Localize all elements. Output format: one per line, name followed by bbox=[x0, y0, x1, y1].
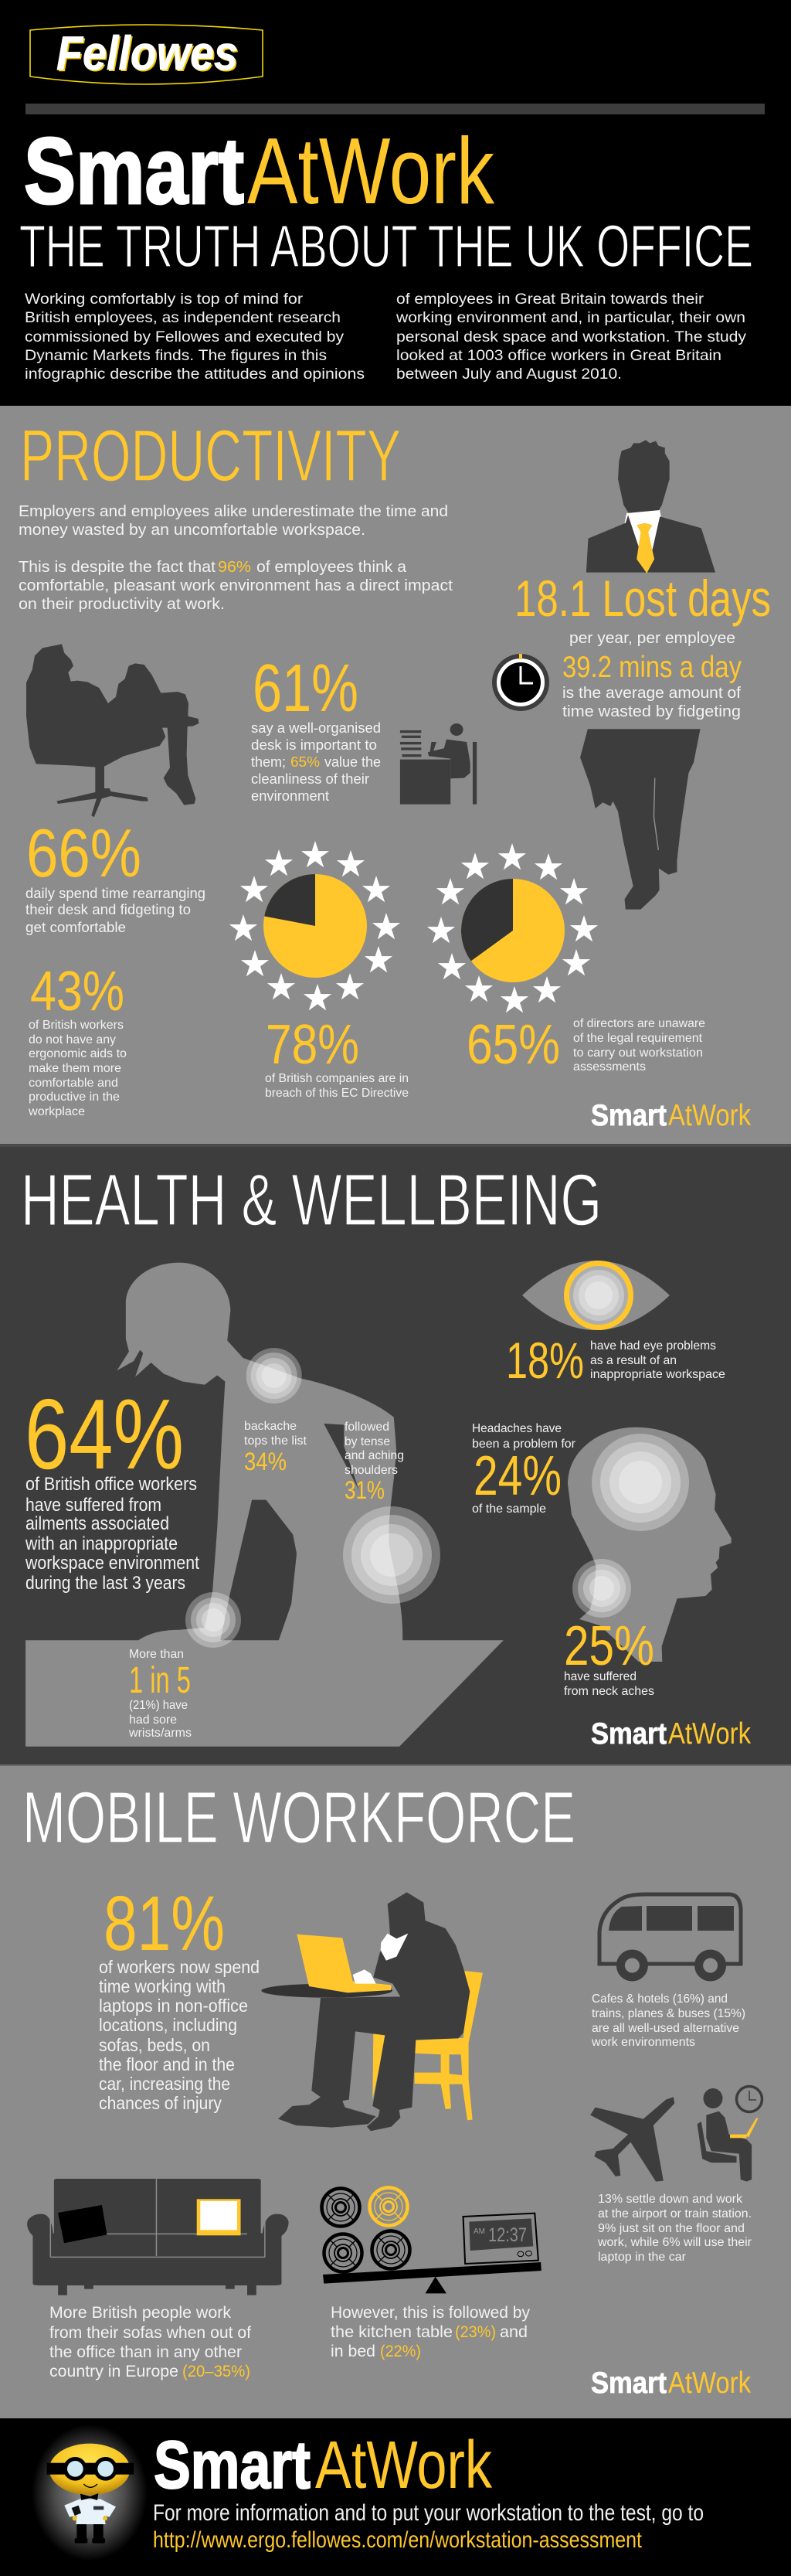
stat: 61%: desk is important to bbox=[251, 737, 377, 753]
illustration: head profile bbox=[568, 1428, 732, 1662]
icon: seated person with laptop and clock bbox=[698, 2087, 762, 2182]
text: cafes and hotels: Cafes & hotels (16%) and bbox=[592, 1992, 728, 2006]
stat: 64%: workspace environment bbox=[25, 1553, 199, 1574]
icon: desk worker bbox=[400, 723, 477, 805]
stat: 61%: environment bbox=[251, 788, 329, 804]
stat: 81%: laptops in non-office bbox=[99, 1996, 248, 2016]
text: kitchen table and bed: (23%) bbox=[455, 2323, 496, 2341]
logo: SmartAtWork footer bbox=[154, 2428, 492, 2503]
panel: health background bbox=[0, 1144, 791, 1764]
logo: SmartAtWork footer: Smart bbox=[154, 2428, 311, 2503]
text: cafes and hotels: trains, planes & buses (15%) bbox=[592, 2007, 745, 2020]
intro text: left column bbox=[25, 291, 365, 383]
stat: 64% bbox=[25, 1379, 199, 1594]
stat: backache 34% bbox=[244, 1420, 307, 1475]
text: kitchen table and bed bbox=[331, 2304, 530, 2360]
panel: mobile workforce background bbox=[0, 1764, 791, 2418]
intro text: right column: between July and August 2010. bbox=[396, 366, 622, 383]
stat: 61%: say a well-organised bbox=[251, 720, 381, 736]
intro text: left column: infographic describe the attitudes and opinions bbox=[25, 366, 365, 383]
icon: clock bbox=[492, 654, 549, 711]
text: airport and train station: work, while 6% will use their bbox=[597, 2236, 752, 2249]
text: airport and train station: laptop in the car bbox=[598, 2251, 687, 2264]
icon: eye bbox=[522, 1261, 670, 1330]
logo: Fellowes: Fellowes bbox=[56, 27, 238, 80]
logo: SmartAtWork mobile: Smart bbox=[591, 2367, 667, 2400]
stat: 43%: 43% bbox=[30, 961, 124, 1023]
stat: 66%: daily spend time rearranging bbox=[25, 885, 205, 901]
stat: shoulders 31%: shoulders bbox=[345, 1464, 398, 1477]
illustration: man with laptop at cafe table bbox=[261, 1892, 483, 2131]
text: airport and train station: 13% settle down and work bbox=[598, 2193, 743, 2206]
panel: productivity background bbox=[0, 406, 791, 1144]
stat: 61% bbox=[251, 651, 381, 804]
text: kitchen table and bed: in bed bbox=[331, 2343, 375, 2360]
text: productivity intro: Employers and employees alike underestimate the time and bbox=[19, 503, 448, 520]
text: website address: http://www.ergo.fellowes.com/en/workstation-assessment bbox=[153, 2527, 643, 2553]
stat: 18%: inappropriate workspace bbox=[590, 1368, 725, 1381]
text: productivity intro: on their productivity at work. bbox=[19, 596, 225, 613]
intro text: left column: commissioned by Fellowes and executed by bbox=[25, 328, 344, 345]
icon: wrist pain rings bbox=[185, 1592, 241, 1648]
text: sofas: (20–35%) bbox=[182, 2363, 250, 2380]
stat: 66%: 66% bbox=[26, 815, 141, 891]
illustration: seesaw with hob rings and alarm clock bbox=[321, 2187, 541, 2293]
intro text: left column: Dynamic Markets finds. The figures in this bbox=[25, 347, 327, 364]
stat: 64%: of British office workers bbox=[25, 1474, 197, 1495]
text: airport and train station bbox=[597, 2193, 752, 2264]
stat: 81%: car, increasing the bbox=[99, 2074, 230, 2094]
illustration: seesaw with hob rings and alarm clock: 12:37 bbox=[488, 2224, 527, 2246]
stat: 65%: to carry out workstation bbox=[573, 1046, 703, 1060]
title: SmartAtWork: AtWork bbox=[247, 118, 495, 223]
stat: backache 34%: backache bbox=[244, 1420, 297, 1433]
text: airport and train station: 9% just sit on the floor and bbox=[598, 2222, 745, 2235]
text: sofas: More British people work bbox=[49, 2304, 232, 2322]
stat: 25%: from neck aches bbox=[564, 1685, 654, 1698]
stat: 1 in 5: 1 in 5 bbox=[129, 1660, 191, 1701]
text: productivity intro: money wasted by an uncomfortable workspace. bbox=[19, 522, 365, 539]
stat: 78% bbox=[265, 1014, 409, 1100]
text: cafes and hotels: are all well-used alternative bbox=[592, 2022, 739, 2035]
illustration: businessman legs bbox=[580, 729, 701, 910]
icon: plane bbox=[590, 2097, 674, 2182]
stat: shoulders 31%: and aching bbox=[345, 1449, 404, 1462]
stat: 43%: of British workers bbox=[29, 1019, 124, 1032]
stat: shoulders 31%: followed bbox=[345, 1421, 389, 1434]
intro text: right column: of employees in Great Britain towards their bbox=[396, 291, 704, 308]
intro text: left column: British employees, as independent research bbox=[25, 309, 341, 326]
stat: 65% bbox=[467, 1014, 705, 1076]
stat: 66%: their desk and fidgeting to bbox=[25, 901, 191, 917]
stat: 61%: cleanliness of their bbox=[251, 771, 369, 787]
icon: bus bbox=[599, 1894, 741, 1977]
stat: 1 in 5: More than bbox=[129, 1648, 184, 1661]
stat: 81%: the floor and in the bbox=[99, 2054, 235, 2074]
logo: SmartAtWork health bbox=[591, 1717, 751, 1751]
stat: 81%: of workers now spend bbox=[99, 1957, 260, 1977]
stat: 64%: have suffered from bbox=[25, 1495, 161, 1516]
intro text: right column: working environment and, in particular, their own bbox=[396, 309, 745, 326]
stat: 64%: with an inappropriate bbox=[25, 1533, 178, 1554]
logo: Fellowes: Fellowes bbox=[58, 29, 239, 82]
stat: 1 in 5: (21%) have bbox=[129, 1699, 188, 1712]
stat: 81%: locations, including bbox=[99, 2015, 237, 2035]
stat: 61%: 65% bbox=[290, 754, 320, 770]
stat: 39.2 mins a day: time wasted by fidgeting bbox=[562, 703, 741, 720]
stat: 25%: 25% bbox=[564, 1615, 654, 1677]
stat: headaches 24% bbox=[472, 1422, 576, 1516]
stat: 1 in 5: had sore bbox=[129, 1713, 177, 1727]
stat: 78%: of British companies are in bbox=[265, 1072, 409, 1085]
stat: 39.2 mins a day bbox=[562, 651, 742, 720]
stat: 66% bbox=[25, 815, 205, 935]
text: kitchen table and bed: the kitchen table bbox=[331, 2323, 453, 2341]
stat: headaches 24%: been a problem for bbox=[472, 1438, 576, 1451]
logo: SmartAtWork mobile bbox=[591, 2367, 751, 2400]
stat: 65%: of the legal requirement bbox=[573, 1032, 703, 1045]
text: productivity intro: comfortable, pleasant work environment has a direct impact bbox=[19, 577, 453, 594]
text: sofas bbox=[49, 2304, 251, 2380]
stat: backache 34%: 34% bbox=[244, 1448, 287, 1475]
icon: headache rings bbox=[592, 1434, 689, 1531]
chart: 65% pie with EU stars bbox=[427, 843, 598, 1012]
text: airport and train station: at the airport or train station. bbox=[598, 2207, 752, 2220]
text: cafes and hotels: work environments bbox=[591, 2036, 695, 2049]
illustration: sofa with laptop bbox=[27, 2179, 289, 2295]
illustration: woman leaning on desk bbox=[25, 1263, 504, 1747]
stat: headaches 24%: 24% bbox=[474, 1445, 562, 1507]
illustration: seesaw with hob rings and alarm clock: AM bbox=[474, 2227, 485, 2236]
text: kitchen table and bed: (22%) bbox=[380, 2343, 421, 2360]
stat: 81%: 81% bbox=[104, 1880, 225, 1967]
stat: 43%: productive in the bbox=[29, 1091, 120, 1104]
stat: 81% bbox=[99, 1880, 260, 2113]
stat: shoulders 31% bbox=[345, 1421, 404, 1504]
stat: 61%: value the bbox=[324, 754, 381, 770]
stat: 39.2 mins a day: is the average amount of bbox=[562, 685, 741, 702]
stat: 61%: 61% bbox=[253, 651, 358, 726]
stat: 18.1 lost days bbox=[514, 570, 771, 647]
stat: 61%: them; bbox=[251, 754, 286, 770]
stat: 64%: ailments associated bbox=[25, 1513, 169, 1534]
stat: 1 in 5 bbox=[128, 1648, 192, 1740]
text: productivity intro: 96% bbox=[218, 559, 251, 576]
stat: 43%: do not have any bbox=[29, 1033, 116, 1046]
title: SmartAtWork: Smart bbox=[24, 118, 244, 223]
intro text: right column bbox=[396, 291, 746, 383]
stat: 1 in 5: wrists/arms bbox=[128, 1727, 192, 1740]
text: kitchen table and bed: However, this is followed by bbox=[331, 2304, 530, 2322]
text: productivity intro: This is despite the fact that bbox=[19, 559, 216, 576]
title: SmartAtWork bbox=[24, 118, 495, 223]
text: cafes and hotels bbox=[591, 1992, 745, 2049]
stat: 25%: have suffered bbox=[564, 1670, 637, 1683]
stat: shoulders 31%: 31% bbox=[345, 1476, 385, 1504]
stat: 39.2 mins a day: 39.2 mins a day bbox=[562, 651, 742, 684]
stat: 81%: time working with bbox=[99, 1976, 226, 1996]
panel: header background bbox=[0, 0, 791, 406]
intro text: right column: looked at 1003 office workers in Great Britain bbox=[396, 347, 721, 364]
panel: footer background bbox=[0, 2418, 791, 2576]
stat: 81%: sofas, beds, on bbox=[99, 2035, 210, 2055]
illustration: woman in swivel chair bbox=[26, 644, 199, 817]
stat: headaches 24%: Headaches have bbox=[472, 1422, 562, 1435]
icon: shoulder pain rings bbox=[343, 1506, 440, 1604]
logo: SmartAtWork productivity bbox=[591, 1099, 751, 1132]
text: sofas: country in Europe bbox=[49, 2363, 178, 2380]
logo: SmartAtWork health: AtWork bbox=[668, 1717, 751, 1751]
stat: 18%: 18% bbox=[506, 1332, 584, 1389]
stat: 43%: ergonomic aids to bbox=[29, 1047, 127, 1060]
logo: SmartAtWork health: Smart bbox=[591, 1717, 667, 1751]
logo: SmartAtWork mobile: AtWork bbox=[668, 2367, 751, 2400]
illustration: mascot with glasses bbox=[32, 2425, 148, 2561]
stat: 43%: comfortable and bbox=[29, 1077, 118, 1090]
stat: 65%: assessments bbox=[573, 1060, 646, 1074]
heading: productivity: PRODUCTIVITY bbox=[20, 415, 401, 497]
stat: shoulders 31%: by tense bbox=[345, 1435, 390, 1448]
text: productivity intro bbox=[19, 503, 453, 613]
stat: 18%: as a result of an bbox=[590, 1354, 677, 1367]
text: kitchen table and bed: and bbox=[500, 2323, 528, 2341]
stat: headaches 24%: of the sample bbox=[472, 1502, 546, 1516]
stat: 43%: workplace bbox=[28, 1105, 85, 1118]
stat: 18%: have had eye problems bbox=[590, 1339, 716, 1353]
stat: 64%: 64% bbox=[25, 1379, 184, 1490]
logo: SmartAtWork productivity: Smart bbox=[591, 1099, 667, 1132]
heading: mobile workforce: MOBILE WORKFORCE bbox=[22, 1777, 575, 1859]
stat: 81%: chances of injury bbox=[99, 2093, 222, 2113]
intro text: right column: personal desk space and workstation. The study bbox=[396, 328, 746, 345]
text: sofas: the office than in any other bbox=[49, 2343, 242, 2361]
stat: 78%: 78% bbox=[266, 1014, 359, 1076]
logo: SmartAtWork productivity: AtWork bbox=[668, 1099, 751, 1132]
stat: 66%: get comfortable bbox=[25, 919, 126, 935]
logo: SmartAtWork footer: AtWork bbox=[315, 2428, 492, 2503]
text: sofas: from their sofas when out of bbox=[49, 2324, 251, 2342]
stat: 78%: breach of this EC Directive bbox=[265, 1087, 409, 1100]
icon: neck ache rings bbox=[572, 1559, 631, 1618]
stat: 25% bbox=[564, 1615, 654, 1698]
stat: backache 34%: tops the list bbox=[244, 1434, 307, 1448]
illustration: businessman upper body bbox=[586, 440, 715, 573]
chart: 78% pie with EU stars bbox=[229, 841, 400, 1010]
stat: 18.1 lost days: per year, per employee bbox=[569, 630, 735, 647]
stat: 64%: during the last 3 years bbox=[25, 1573, 185, 1594]
stat: 18% bbox=[506, 1332, 725, 1389]
stat: 43%: make them more bbox=[29, 1062, 121, 1075]
intro text: left column: Working comfortably is top of mind for bbox=[25, 291, 304, 308]
stat: 65%: 65% bbox=[467, 1014, 560, 1076]
icon: back pain rings bbox=[246, 1348, 302, 1404]
stat: 65%: of directors are unaware bbox=[573, 1017, 705, 1030]
header bar bbox=[25, 104, 765, 114]
stat: 43% bbox=[28, 961, 127, 1118]
text: productivity intro: of employees think a bbox=[256, 559, 407, 576]
